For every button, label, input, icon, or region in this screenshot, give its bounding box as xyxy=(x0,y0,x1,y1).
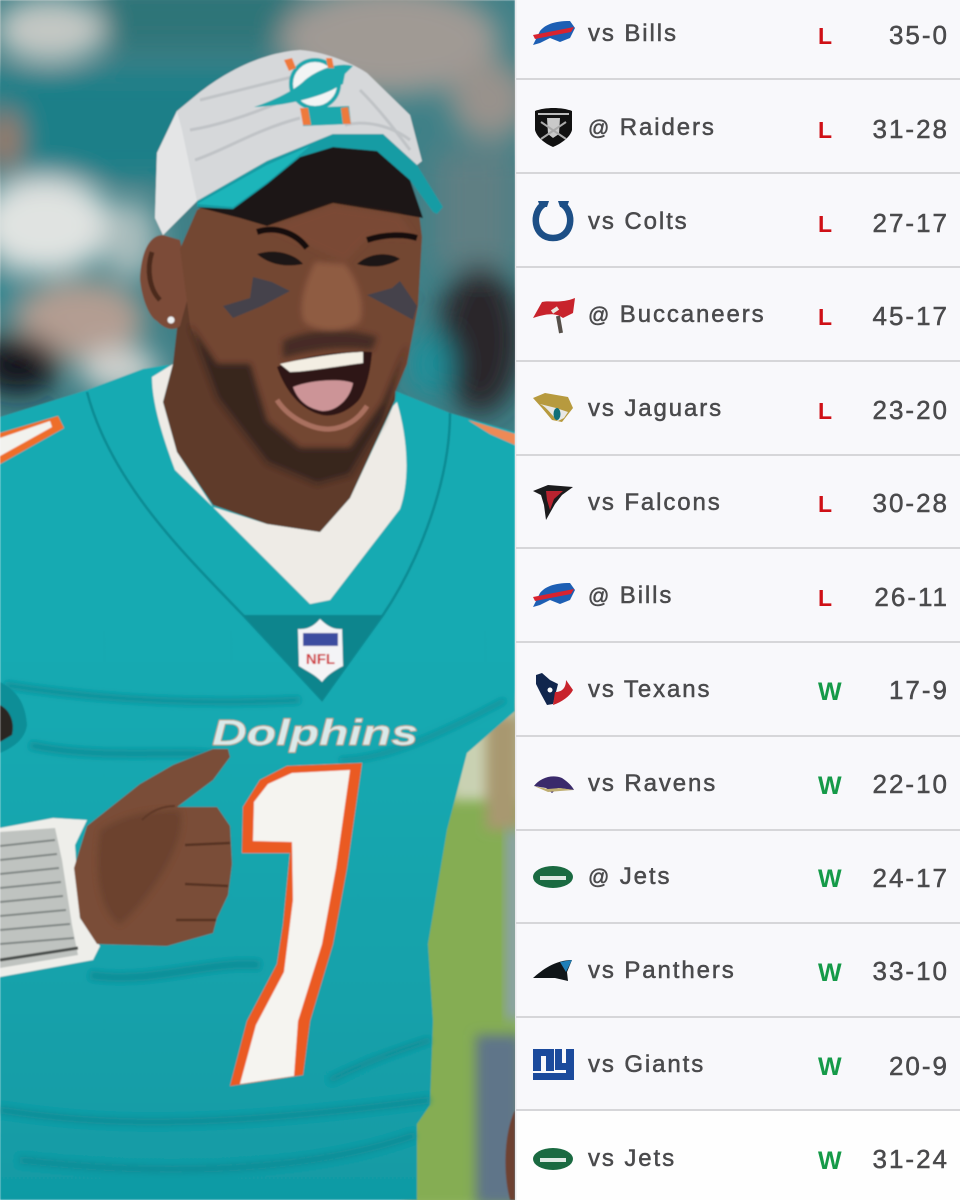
row: vs Jets: vs Jets xyxy=(588,1145,676,1172)
row: @ Bills xyxy=(533,582,949,612)
row: vs Falcons xyxy=(533,485,949,520)
beard xyxy=(190,325,407,484)
row: @ Jets: 24-17 xyxy=(872,863,949,893)
icon: Bills logo xyxy=(533,21,575,45)
row: vs Ravens: 22-10 xyxy=(872,769,949,799)
row: vs Texans: 17-9 xyxy=(889,675,949,705)
eyes xyxy=(257,252,303,266)
row: vs Falcons: L xyxy=(818,491,832,517)
icon: Jaguars head xyxy=(533,393,573,422)
row: @ Jets xyxy=(533,863,949,893)
row: vs Jets: 31-24 xyxy=(872,1144,949,1174)
mustache xyxy=(283,331,377,358)
thumbs-up hand xyxy=(74,749,232,946)
icon: Bills logo xyxy=(533,583,575,607)
row: vs Texans: vs Texans xyxy=(588,676,711,703)
icon: Buccaneers flag xyxy=(533,298,575,333)
icon: Ravens bird xyxy=(534,776,574,793)
row: vs Texans xyxy=(536,673,949,706)
fold shadows xyxy=(0,685,505,1169)
row: @ Bills: L xyxy=(818,585,832,611)
cap stripes xyxy=(190,75,410,160)
jersey xyxy=(0,364,515,1200)
NFL shield xyxy=(298,619,343,682)
row: vs Falcons: 30-28 xyxy=(872,488,949,518)
nose xyxy=(301,262,362,330)
ear xyxy=(140,235,190,329)
row: @ Buccaneers: L xyxy=(818,304,832,330)
row: @ Jets: W xyxy=(818,865,842,893)
row: vs Bills xyxy=(533,20,949,50)
icon: Panthers head xyxy=(533,960,572,981)
row: vs Jets xyxy=(533,1144,949,1175)
row: vs Panthers: vs Panthers xyxy=(588,957,736,984)
row: @ Buccaneers: @ Buccaneers xyxy=(588,301,766,328)
under brim shadow xyxy=(197,147,423,226)
row: vs Ravens: vs Ravens xyxy=(588,770,717,797)
chest V insert xyxy=(243,615,383,700)
row: @ Raiders: @ Raiders xyxy=(588,114,716,141)
row: @ Bills: 26-11 xyxy=(874,582,949,612)
row: vs Texans: W xyxy=(818,678,842,706)
cap dolphins logo xyxy=(254,58,353,126)
photo: smiling quarterback in teal jersey xyxy=(0,0,530,1200)
row: @ Buccaneers: 45-17 xyxy=(872,301,949,331)
row: vs Jaguars: 23-20 xyxy=(872,395,949,425)
row: vs Bills: 35-0 xyxy=(889,20,949,50)
forehead highlight xyxy=(270,202,404,254)
row: vs Jets: W xyxy=(818,1147,842,1175)
icon: Giants NY xyxy=(533,1049,574,1080)
row: vs Bills: vs Bills xyxy=(588,20,678,47)
mouth xyxy=(277,352,372,416)
icon: Jets oval xyxy=(533,1148,573,1170)
row: vs Colts xyxy=(536,201,949,238)
icon: Raiders shield xyxy=(535,108,572,147)
collar V seams xyxy=(87,392,450,700)
row: @ Jets: @ Jets xyxy=(588,863,671,890)
row: vs Panthers: W xyxy=(818,959,842,987)
row: @ Raiders: 31-28 xyxy=(872,114,949,144)
row: vs Colts: L xyxy=(818,211,832,237)
row: vs Colts: 27-17 xyxy=(872,208,949,238)
row: @ Raiders: L xyxy=(818,117,832,143)
jersey wordmark: Dolphins xyxy=(212,712,418,753)
row: vs Jaguars: vs Jaguars xyxy=(588,395,723,422)
row: vs Ravens xyxy=(534,769,949,800)
row: vs Giants: 20-9 xyxy=(889,1051,949,1081)
cap xyxy=(155,50,443,235)
grass field xyxy=(405,760,525,1200)
results panel xyxy=(515,0,960,1200)
jersey number 1 xyxy=(230,763,362,1086)
icon: Texans bull xyxy=(536,673,573,705)
row: vs Giants xyxy=(533,1049,949,1081)
row: vs Panthers: 33-10 xyxy=(872,956,949,986)
eyebrows xyxy=(257,230,307,248)
eye black xyxy=(223,277,290,318)
NFL shield: NFL xyxy=(306,651,335,668)
row: vs Colts: vs Colts xyxy=(588,208,689,235)
armhole xyxy=(0,682,27,753)
neck xyxy=(163,290,400,532)
row: vs Bills: L xyxy=(818,23,832,49)
row: @ Buccaneers xyxy=(533,298,949,333)
row: vs Giants: W xyxy=(818,1053,842,1081)
cap brim xyxy=(197,134,443,214)
row: vs Ravens: W xyxy=(818,772,842,800)
row: vs Panthers xyxy=(533,956,949,987)
row: vs Falcons: vs Falcons xyxy=(588,489,722,516)
white undershirt xyxy=(152,364,406,604)
wrist tape xyxy=(0,818,100,977)
row: vs Jaguars xyxy=(533,393,949,425)
icon: Falcons bird xyxy=(533,485,573,520)
row: @ Raiders xyxy=(535,108,949,147)
head xyxy=(180,202,422,484)
row: vs Giants: vs Giants xyxy=(588,1051,705,1078)
row: vs Jaguars: L xyxy=(818,398,832,424)
icon: Jets oval xyxy=(533,866,573,888)
blurred stadium background xyxy=(0,0,530,1200)
neck and face xyxy=(140,147,423,532)
row: @ Bills: @ Bills xyxy=(588,582,673,609)
sleeve number fragment xyxy=(0,416,64,464)
icon: Colts horseshoe xyxy=(536,201,570,238)
